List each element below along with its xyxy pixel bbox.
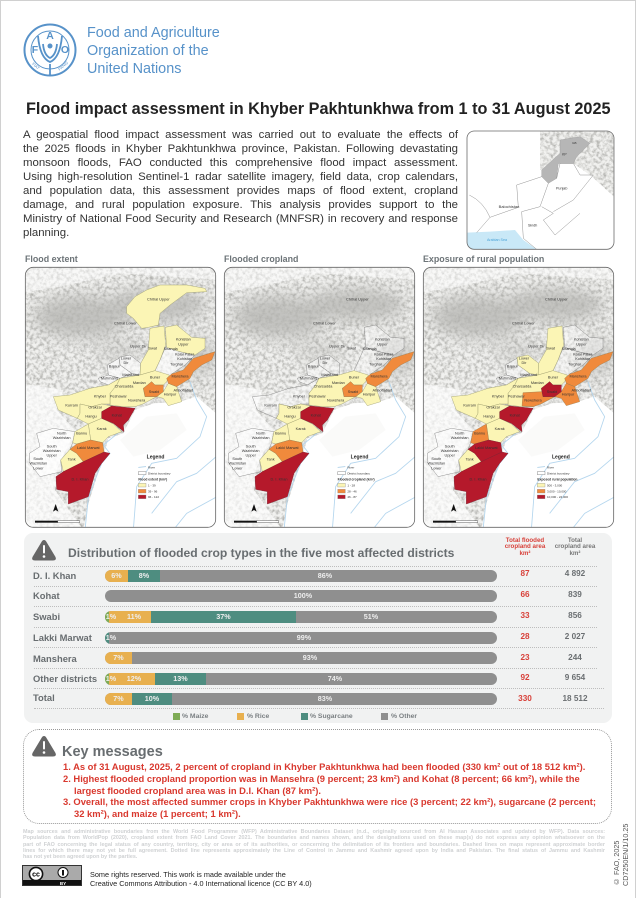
map: exposure of rural population: Kurram <box>463 404 476 408</box>
intro text: Using high-resolution Sentinel-1 radar satellite imagery, field data, crop calendars, <box>23 171 458 183</box>
map: flooded cropland: Flooded cropland (km²) <box>338 478 375 482</box>
inset locator map: KP <box>562 153 567 157</box>
map: flooded cropland: Nowshera <box>327 399 345 403</box>
map: exposure of rural population: Swabi <box>546 390 557 394</box>
bar: Kohat: 100% <box>294 591 312 600</box>
map: flood extent: Mardan <box>133 381 146 385</box>
intro text: monsoon floods, FAO conducted this comprehensive flood impact assessment. <box>23 157 458 169</box>
map: flooded cropland: Peshawar <box>309 395 327 399</box>
map: exposure of rural population: Abbottabad <box>571 389 591 393</box>
legend: rice <box>237 713 269 720</box>
CC BY licence badge: BY <box>60 881 66 886</box>
map: exposure of rural population: Kolai Palas <box>573 352 592 356</box>
value: Kohat total: 839 <box>568 590 582 599</box>
icon: warning triangle (key messages) <box>32 736 56 756</box>
map heading: flood extent: Flood extent <box>25 254 78 264</box>
map: exposure of rural population: Legend <box>552 455 569 461</box>
map: flooded cropland: Chitral Lower <box>313 322 336 326</box>
legend: sugarcane: % Sugarcane <box>310 713 353 720</box>
map: flood extent: Kohistan <box>177 357 192 361</box>
map: flooded cropland: Kohistan <box>375 338 390 342</box>
disclaimer: has not yet been agreed upon by the parties. <box>23 854 137 860</box>
map: flood extent: Manshera <box>171 374 189 378</box>
copyright and document code: © FAO, 2025 <box>612 841 621 886</box>
map: flooded cropland: Shangla <box>363 347 378 351</box>
bar: Total: 10% <box>145 694 159 703</box>
key messages heading: Key messages <box>62 744 163 760</box>
map: flooded cropland: Kohat <box>311 413 322 417</box>
map: flood extent: Tank <box>68 458 76 462</box>
row label: Manshera: Manshera <box>33 653 77 664</box>
map: flooded cropland: 46 - 87 <box>347 495 357 499</box>
column header: total cropland area: cropland area <box>555 543 595 550</box>
map: exposure of rural population: 3,000 - 10,000 <box>547 489 566 493</box>
value: Other districts total: 9 654 <box>565 673 585 682</box>
column header: total cropland area: Total <box>568 537 582 544</box>
map: exposure of rural population: Charsadda <box>512 384 532 388</box>
value: Other districts flooded: 92 <box>520 673 530 682</box>
FAO logo: FIAT <box>31 61 41 71</box>
inset locator map <box>466 130 614 250</box>
map: flood extent: 39 - 96 <box>148 489 158 493</box>
map: exposure of rural population: 500 - 3,000 <box>547 483 562 487</box>
map: flooded cropland: Orakzai <box>287 406 301 410</box>
map: flood extent: Charsadda <box>115 384 134 388</box>
value: Lakki Marwat total: 2 027 <box>565 632 585 641</box>
message 2: 2. Highest flooded cropland proportion was in Mansehra (9 percent; 23 km²) and Kohat (8 percent; 66 km²), while the <box>63 773 580 784</box>
map: flood extent: Upper <box>178 343 189 347</box>
map: flood extent: Torghar <box>170 363 184 367</box>
map: flooded cropland: 1 - 28 <box>347 483 355 487</box>
value: Swabi total: 856 <box>568 611 582 620</box>
FAO logo <box>24 24 76 76</box>
map: flood extent: Kolai Palas <box>175 352 194 356</box>
disclaimer: Population data from WorldPop (2020), cropland extent from FAO Land Cover 2021. The boundaries and names shown, and the designations used on these map(s) do not express any opinion whatsoever on the <box>23 835 605 841</box>
map: flooded cropland: Karak <box>296 427 306 431</box>
panel: crop distribution chart <box>24 533 612 723</box>
map: exposure of rural population: Upper <box>576 343 587 347</box>
map: flooded cropland: Tank <box>267 458 275 462</box>
organization name <box>87 25 220 77</box>
map: flood extent: Upper <box>46 454 58 458</box>
intro text: Ministry of National Food Security and Research (MNFSR) in recovery and response <box>23 213 458 225</box>
bar: D. I. Khan: 86% <box>318 571 332 580</box>
intro text: the 2025 floods in Khyber Pakhtunkhwa province, Pakistan. Following devastating <box>23 143 458 155</box>
panel: key messages <box>23 729 612 824</box>
map: exposure of rural population: Haripur <box>561 393 575 397</box>
intro text: planning. <box>23 227 69 239</box>
map: flooded cropland: Kolai Palas <box>374 352 393 356</box>
map: flood extent: Flood extent (km²) <box>138 478 167 482</box>
map: exposure of rural population: Lower <box>431 466 442 470</box>
bar: Swabi: 37% <box>216 612 231 621</box>
message 2: largest flooded cropland area was in D.I. Khan (87 km²). <box>74 785 321 796</box>
bar: Swabi <box>105 611 497 623</box>
map: exposure of rural population: Upper <box>444 454 455 458</box>
map: exposure of rural population: Hangu <box>483 414 494 418</box>
CC BY licence badge: cc <box>32 872 40 878</box>
map: flood extent: 1 - 39 <box>148 483 156 487</box>
map: flooded cropland: Lakki Marwat <box>276 446 300 450</box>
bar: Other districts: 1% <box>106 674 116 683</box>
map: flooded cropland: Waziristan <box>242 449 260 453</box>
map: flood extent: Chitral Lower <box>114 322 137 326</box>
map: flooded cropland: River <box>347 465 354 469</box>
map: exposure of rural population: Swat <box>546 346 555 350</box>
map: exposure of rural population: Mardan <box>530 381 543 385</box>
bar: Manshera: 7% <box>113 653 124 662</box>
map: flood extent: Abbottabad <box>174 389 193 393</box>
map: flood extent: Karak <box>97 427 107 431</box>
map: flooded cropland: Abbottabad <box>373 389 392 393</box>
map: exposure of rural population: Malakand <box>520 373 537 377</box>
bar: Swabi: 51% <box>364 612 378 621</box>
map: flooded cropland: Upper <box>377 343 388 347</box>
row label: Swabi: Swabi <box>33 611 60 622</box>
map: exposure of rural population: Mohmand <box>498 376 515 380</box>
map: flood extent: District boundary <box>148 471 171 475</box>
map: flooded cropland: Hangu <box>284 414 296 418</box>
map: exposure of rural population: Torghar <box>568 363 581 367</box>
map: flooded cropland: Charsadda <box>314 384 333 388</box>
map: exposure of rural population: Khyber <box>492 395 504 399</box>
FAO logo: PANIS <box>57 60 69 72</box>
map: flooded cropland: Swat <box>347 346 357 350</box>
map: flooded cropland: Swabi <box>348 390 358 394</box>
chart heading: Distribution of flooded crop types in the five most affected districts <box>68 546 454 560</box>
map: exposure of rural population: South <box>431 457 441 461</box>
value: Swabi flooded: 33 <box>520 611 530 620</box>
map: flood extent: Swat <box>148 346 158 350</box>
map: flooded cropland: 28 - 46 <box>347 489 357 493</box>
bar: Lakki Marwat: 1% <box>106 633 116 642</box>
bar: D. I. Khan <box>105 570 497 582</box>
intro text: damage, and rural population exposure. This analysis provides support to the <box>23 199 458 211</box>
map: exposure of rural population: Waziristan <box>427 462 445 466</box>
map: flood extent: Orakzai <box>88 406 102 410</box>
bar: Kohat <box>105 590 497 602</box>
map: flooded cropland: Haripur <box>363 393 376 397</box>
map: flooded cropland: Torghar <box>369 363 383 367</box>
map: exposure of rural population: Kohistan <box>573 338 588 342</box>
map: flood extent: South <box>33 457 43 461</box>
map: exposure of rural population: Shangla <box>561 347 576 351</box>
map: flooded cropland: Legend <box>351 455 368 461</box>
map: flood extent: Haripur <box>164 393 177 397</box>
map: flooded cropland: Kohistan <box>376 357 391 361</box>
map: flooded cropland: Dir <box>323 361 328 365</box>
value: Total flooded: 330 <box>518 694 532 703</box>
licence text <box>90 870 312 888</box>
map: exposure of rural population: Kohat <box>509 413 520 417</box>
map: exposure of rural population: Dir <box>521 361 527 365</box>
bar: Total: 83% <box>318 694 332 703</box>
copyright and document code: CD7250EN/1/10.25 <box>621 824 630 886</box>
map: flood extent: Hangu <box>85 414 97 418</box>
map: exposure of rural population: Waziristan <box>440 449 458 453</box>
bar: Other districts <box>105 673 497 685</box>
map: flood extent: River <box>148 465 155 469</box>
map: flood extent: Shangla <box>164 347 179 351</box>
column header: total flooded cropland area: cropland area <box>505 543 545 550</box>
column header: total flooded cropland area <box>505 537 546 557</box>
inset locator map: Balochistan <box>499 204 519 209</box>
map: flooded cropland: Mohmand <box>300 376 317 380</box>
organization name: United Nations <box>87 61 181 77</box>
bar: Swabi: 11% <box>127 612 141 621</box>
column header: total flooded cropland area: km² <box>519 550 530 557</box>
map: flood extent: Waziristan <box>29 462 47 466</box>
row label: D. I. Khan: D. I. Khan <box>33 570 76 581</box>
row label: Lakki Marwat: Lakki Marwat <box>33 632 92 643</box>
map: flooded cropland: Buner <box>349 375 360 379</box>
map: exposure of rural population: North <box>455 431 464 435</box>
map: exposure of rural population <box>422 266 614 528</box>
map: exposure of rural population: Bajaur <box>506 364 518 368</box>
map: flood extent: South <box>47 444 57 448</box>
map: flooded cropland: District boundary <box>347 471 370 475</box>
legend: other: % Other <box>391 713 417 720</box>
disclaimer: Map sources and administrative boundaries from the World Food Programme (WFP) Administrative Boundaries Dataset (n.d., originally sourced from Al Hassan Associates and updated by WFP). Data sources: <box>23 829 605 835</box>
map: exposure of rural population: Tank <box>465 458 473 462</box>
column header: total flooded cropland area: Total flooded <box>506 537 544 544</box>
map: exposure of rural population: Karak <box>494 427 504 431</box>
icon: warning triangle (chart) <box>32 540 56 560</box>
map: flood extent: Kohat <box>112 413 123 417</box>
value: Total cropland: 18 512 <box>562 694 588 703</box>
value: Lakki Marwat flooded: 28 <box>520 632 530 641</box>
map: flooded cropland: Manshera <box>370 374 388 378</box>
map: flood extent: Waziristan <box>53 436 71 440</box>
value: D. I. Khan total: 4 892 <box>565 569 585 578</box>
map: flood extent: Upper Dir <box>130 344 147 348</box>
map: flooded cropland: North <box>256 431 265 435</box>
map: flood extent: Lower <box>33 466 44 470</box>
bar: Lakki Marwat <box>105 632 497 644</box>
message 2 <box>63 773 580 796</box>
map: flooded cropland: South <box>232 457 242 461</box>
map: flood extent: Mohmand <box>101 376 118 380</box>
map: exposure of rural population: Waziristan <box>450 436 468 440</box>
bar: Total <box>105 693 497 705</box>
map: exposure of rural population: District boundary <box>547 471 570 475</box>
bar: Lakki Marwat: 99% <box>297 633 311 642</box>
map: exposure of rural population: Peshawar <box>507 395 525 399</box>
map: flood extent: Bajaur <box>109 364 121 368</box>
bar: Other districts: 12% <box>127 674 141 683</box>
map: flood extent: Swabi <box>149 390 159 394</box>
bar: Manshera <box>105 652 497 664</box>
map: exposure of rural population: South <box>444 444 454 448</box>
row label: Other districts: Other districts <box>33 673 97 684</box>
map: exposure of rural population: Buner <box>547 375 558 379</box>
organization name: Organization of the <box>87 43 209 59</box>
disclaimer: part of FAO concerning the legal status of any country, territory, city or area or of its authorities, or concerning the delimitation of its frontiers and boundaries. Dashed lines on maps represent approximate border <box>23 842 605 848</box>
map: exposure of rural population: D. I. Khan <box>469 478 486 482</box>
map: flooded cropland: Upper Dir <box>329 344 346 348</box>
value: Kohat flooded: 66 <box>520 590 530 599</box>
value: Manshera flooded: 23 <box>520 653 530 662</box>
map: flood extent: Kurram <box>65 404 78 408</box>
bar: D. I. Khan: 6% <box>111 571 122 580</box>
organization name: Food and Agriculture <box>87 25 220 41</box>
map: exposure of rural population: Bannu <box>474 432 485 436</box>
map: flooded cropland: Lower <box>232 466 243 470</box>
value: D. I. Khan flooded: 87 <box>520 569 530 578</box>
message 3: 32 km²), and maize (1 percent; 1 km²). <box>74 808 241 819</box>
legend: maize: % Maize <box>182 713 208 720</box>
map: flooded cropland: Upper <box>245 454 257 458</box>
map: flooded cropland: Kurram <box>264 404 277 408</box>
map: exposure of rural population: Kohistan <box>575 357 590 361</box>
map: exposure of rural population: Upper Dir <box>528 344 545 348</box>
map: flood extent: Bannu <box>76 432 87 436</box>
map: flood extent: Waziristan <box>43 449 61 453</box>
legend: rice: % Rice <box>247 713 269 720</box>
intro text <box>23 129 458 239</box>
licence text: Some rights reserved. This work is made available under the <box>90 870 286 879</box>
map: flood extent: North <box>57 431 66 435</box>
map: exposure of rural population: River <box>547 465 554 469</box>
bar: Other districts: 74% <box>328 674 342 683</box>
FAO logo: F <box>32 44 39 56</box>
column header: total cropland area <box>555 537 596 557</box>
intro text: and population data, this assessment provides maps of flood extent, cropland <box>23 185 458 197</box>
map: flooded cropland: Mardan <box>332 381 345 385</box>
map: flood extent: Lakki Marwat <box>77 446 101 450</box>
map: flooded cropland: South <box>246 444 256 448</box>
disclaimer: lines for which there may not yet be full agreement. Dotted line represents approximately the Line of Control in Jammu and Kashmir agreed upon by India and Pakistan. The final status of Jammu and Kashmir <box>23 848 605 854</box>
map: exposure of rural population: 10,000 - 24,000 <box>547 495 568 499</box>
map: flood extent: Buner <box>150 375 161 379</box>
map: flood extent: Peshawar <box>110 395 128 399</box>
map: flood extent: Nowshera <box>128 399 146 403</box>
column header: total cropland area: km² <box>569 550 580 557</box>
inset locator map: Sindh <box>528 223 537 227</box>
bar: D. I. Khan: 8% <box>139 571 149 580</box>
map: flood extent: D. I. Khan <box>71 478 89 482</box>
disclaimer <box>23 829 605 860</box>
FAO logo: O <box>61 44 69 56</box>
row label: Kohat: Kohat <box>33 590 60 601</box>
map: flooded cropland: D. I. Khan <box>270 478 288 482</box>
value: Manshera total: 244 <box>568 653 582 662</box>
map: exposure of rural population: Manshera <box>569 374 587 378</box>
bar: Manshera: 93% <box>303 653 317 662</box>
message 3 <box>63 796 596 819</box>
title: Flood impact assessment in Khyber Pakhtunkhwa from 1 to 31 August 2025 <box>26 100 611 118</box>
map: exposure of rural population: Exposed rural population <box>537 478 577 482</box>
map: flooded cropland: Malakand <box>321 373 338 377</box>
map: flood extent: Malakand <box>122 373 139 377</box>
map heading: flooded cropland: Flooded cropland <box>224 254 298 264</box>
map: exposure of rural population: Lower <box>518 356 530 360</box>
map heading: exposure: Exposure of rural population <box>423 254 544 264</box>
map: flood extent <box>24 266 216 528</box>
message 3: 3. Overall, the most affected summer crops in Khyber Pakhtunkhwa were rice (3 percent; 22 km²), sugarcane (2 percent; <box>63 796 596 807</box>
map: flood extent: Chitral Upper <box>147 297 170 301</box>
map: flooded cropland: Lower <box>320 356 331 360</box>
inset locator map: Punjab <box>556 186 567 190</box>
message 1: 1. As of 31 August, 2025, 2 percent of cropland in Khyber Pakhtunkhwa had been flooded (330 km² out of 18 512 km²). <box>63 761 585 772</box>
map: exposure of rural population: Chitral Upper <box>545 297 568 301</box>
map: flood extent: Dir <box>124 361 129 365</box>
map: flood extent: Kohistan <box>176 338 191 342</box>
map: flood extent: 96 - 122 <box>148 495 159 499</box>
map: exposure of rural population: Lakki Marwat <box>475 446 498 450</box>
map: flooded cropland: Waziristan <box>228 462 246 466</box>
copyright and document code <box>612 824 630 886</box>
row label: Total: Total <box>33 692 55 703</box>
map: flooded cropland: Chitral Upper <box>346 297 369 301</box>
licence text: Creative Commons Attribution - 4.0 International licence (CC BY 4.0) <box>90 879 312 888</box>
map: flood extent: Legend <box>147 455 164 461</box>
map: exposure of rural population: Chitral Lower <box>512 322 535 326</box>
inset locator map: GB <box>572 141 577 145</box>
bar: Swabi: 1% <box>106 612 116 621</box>
map: flooded cropland: Waziristan <box>252 436 270 440</box>
map: flood extent: Lower <box>121 356 132 360</box>
map: flooded cropland: Bajaur <box>308 364 320 368</box>
map: exposure of rural population: Nowshera <box>524 399 542 403</box>
map: flood extent: Khyber <box>94 395 107 399</box>
bar: Other districts: 13% <box>173 674 188 683</box>
map: flooded cropland: Bannu <box>275 432 286 436</box>
inset locator map: Arabian Sea <box>487 238 508 242</box>
map: flooded cropland <box>224 266 416 528</box>
bar: Total: 7% <box>113 694 124 703</box>
intro text: A geospatial flood impact assessment was carried out to evaluate the effects of <box>23 129 458 141</box>
map: exposure of rural population: Orakzai <box>486 406 499 410</box>
map: flooded cropland: Khyber <box>293 395 306 399</box>
FAO logo: A <box>46 30 54 42</box>
CC BY licence badge <box>22 865 82 886</box>
